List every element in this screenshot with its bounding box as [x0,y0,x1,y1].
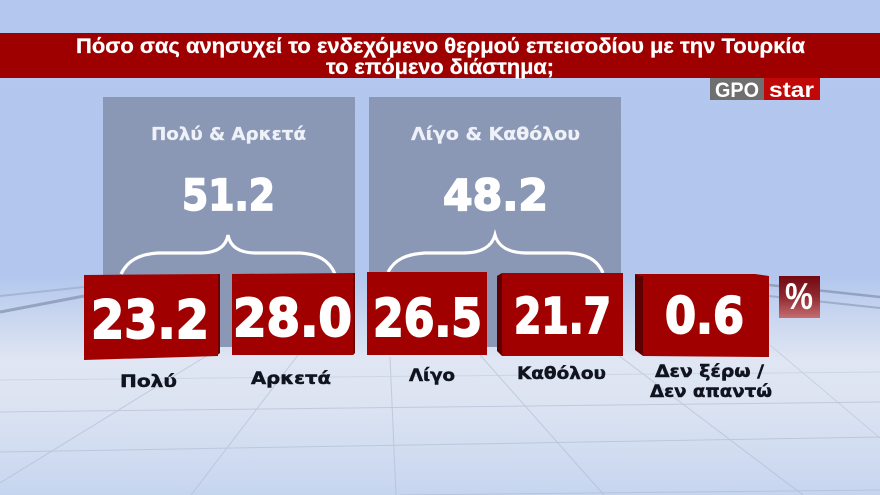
brace: left group [121,235,335,274]
label: Δεν ξέρω / Δεν απαντώ [650,362,772,401]
label: Δεν ξέρω / Δεν απαντώ: Δεν ξέρω / [655,362,765,381]
percent badge: % [785,276,813,317]
value box: Καθόλου 21.7: 21.7 [514,288,611,345]
value box: Καθόλου 21.7 [497,273,623,356]
value box: Λίγο 26.5 [367,272,487,355]
value box: Πολύ 23.2 [84,274,220,360]
label: Καθόλου: Καθόλου [517,364,606,383]
value box: Δεν ξέρω 0.6: 0.6 [665,287,744,345]
value box: Πολύ 23.2: 23.2 [91,290,209,351]
value box: Αρκετά 28.0: 28.0 [233,289,352,349]
title text line 1: Πόσο σας ανησυχεί το ενδεχόμενο θερμού επεισοδίου με την Τουρκία [76,35,805,58]
title banner [0,33,880,79]
panel: Πολύ & Αρκετά [103,97,355,347]
panel: Λίγο & Καθόλου [369,97,621,347]
panel total: 51.2 [182,171,275,221]
label: Αρκετά: Αρκετά [251,369,331,388]
panel heading: Λίγο & Καθόλου [411,124,580,145]
brace: right group [388,235,603,273]
panel total: 48.2 [443,171,548,221]
title text line 2: το επόμενο διάστημα; [326,56,554,79]
label: Λίγο: Λίγο [409,366,455,385]
logo: GPO star: star [769,79,814,102]
logo: GPO star: GPO [715,79,759,102]
label: Δεν ξέρω / Δεν απαντώ: Δεν απαντώ [650,382,772,401]
value box: Λίγο 26.5: 26.5 [373,289,482,349]
logo: GPO star [710,78,820,102]
panel heading: Πολύ & Αρκετά [151,124,306,145]
label: Πολύ: Πολύ [120,372,177,391]
value box: Δεν ξέρω 0.6 [635,274,769,357]
